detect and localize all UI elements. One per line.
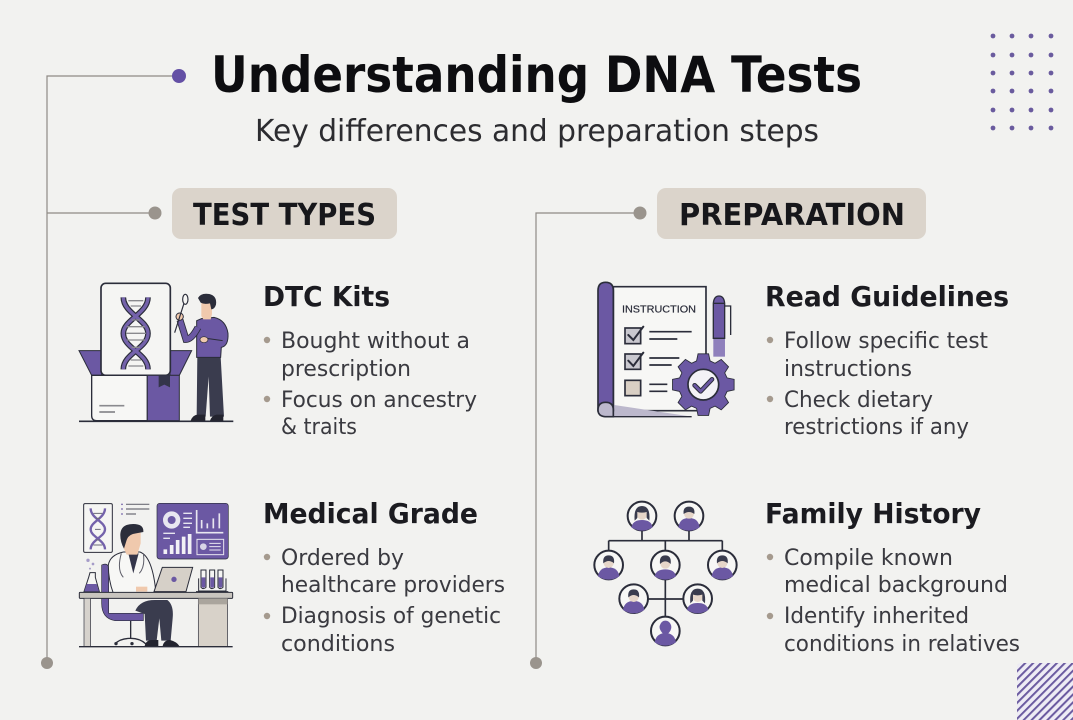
card: Medical Grade: Diagnosis of genetic: [281, 604, 501, 629]
heading: Medical Grade: Medical Grade: [263, 497, 478, 530]
heading: test types: [172, 188, 397, 239]
subtitle: Key differences and preparation steps: [255, 114, 819, 149]
heading: test types: TEST TYPES: [193, 198, 376, 233]
card: Read Guidelines: [765, 280, 1009, 440]
card: Read Guidelines: Follow specific test: [784, 329, 988, 354]
heading: DTC Kits: DTC Kits: [263, 280, 390, 313]
card: Medical Grade: [263, 497, 505, 657]
card: DTC Kits: [263, 280, 477, 440]
card: Family History: Compile known: [784, 546, 953, 571]
card: DTC Kits: & traits: [281, 415, 357, 440]
card: Medical Grade: healthcare providers: [281, 573, 505, 598]
icon: instruction book with gear: [598, 282, 734, 417]
card: Medical Grade: Ordered by: [281, 546, 404, 571]
card: Medical Grade: conditions: [281, 632, 395, 657]
decorative dot grid: [991, 34, 1053, 130]
card: DTC Kits: prescription: [281, 357, 411, 382]
icon: DNA kit box with person: [79, 283, 233, 421]
card: DTC Kits: Bought without a: [281, 329, 470, 354]
card: Family History: conditions in relatives: [784, 632, 1020, 657]
connector: preparation timeline: [530, 206, 646, 669]
card: Read Guidelines: instructions: [784, 357, 912, 382]
heading: Read Guidelines: Read Guidelines: [765, 280, 1009, 313]
card: Family History: [765, 497, 1020, 657]
heading: preparation: [657, 188, 926, 239]
card: Family History: Identify inherited: [784, 604, 969, 629]
icon: instruction book with gear: INSTRUCTION: [622, 304, 696, 315]
heading: preparation: PREPARATION: [679, 198, 905, 233]
decorative hatch square: [1017, 663, 1073, 720]
card: Read Guidelines: Check dietary: [784, 388, 933, 413]
connector: title and test types timeline: [41, 69, 186, 669]
card: Read Guidelines: restrictions if any: [784, 415, 969, 440]
card: Family History: medical background: [784, 573, 1008, 598]
icon: doctor at desk: [79, 503, 233, 647]
heading: Family History: Family History: [765, 497, 981, 530]
title: Understanding DNA Tests: [211, 46, 862, 104]
card: DTC Kits: Focus on ancestry: [281, 388, 477, 413]
icon: family tree: [594, 502, 737, 646]
